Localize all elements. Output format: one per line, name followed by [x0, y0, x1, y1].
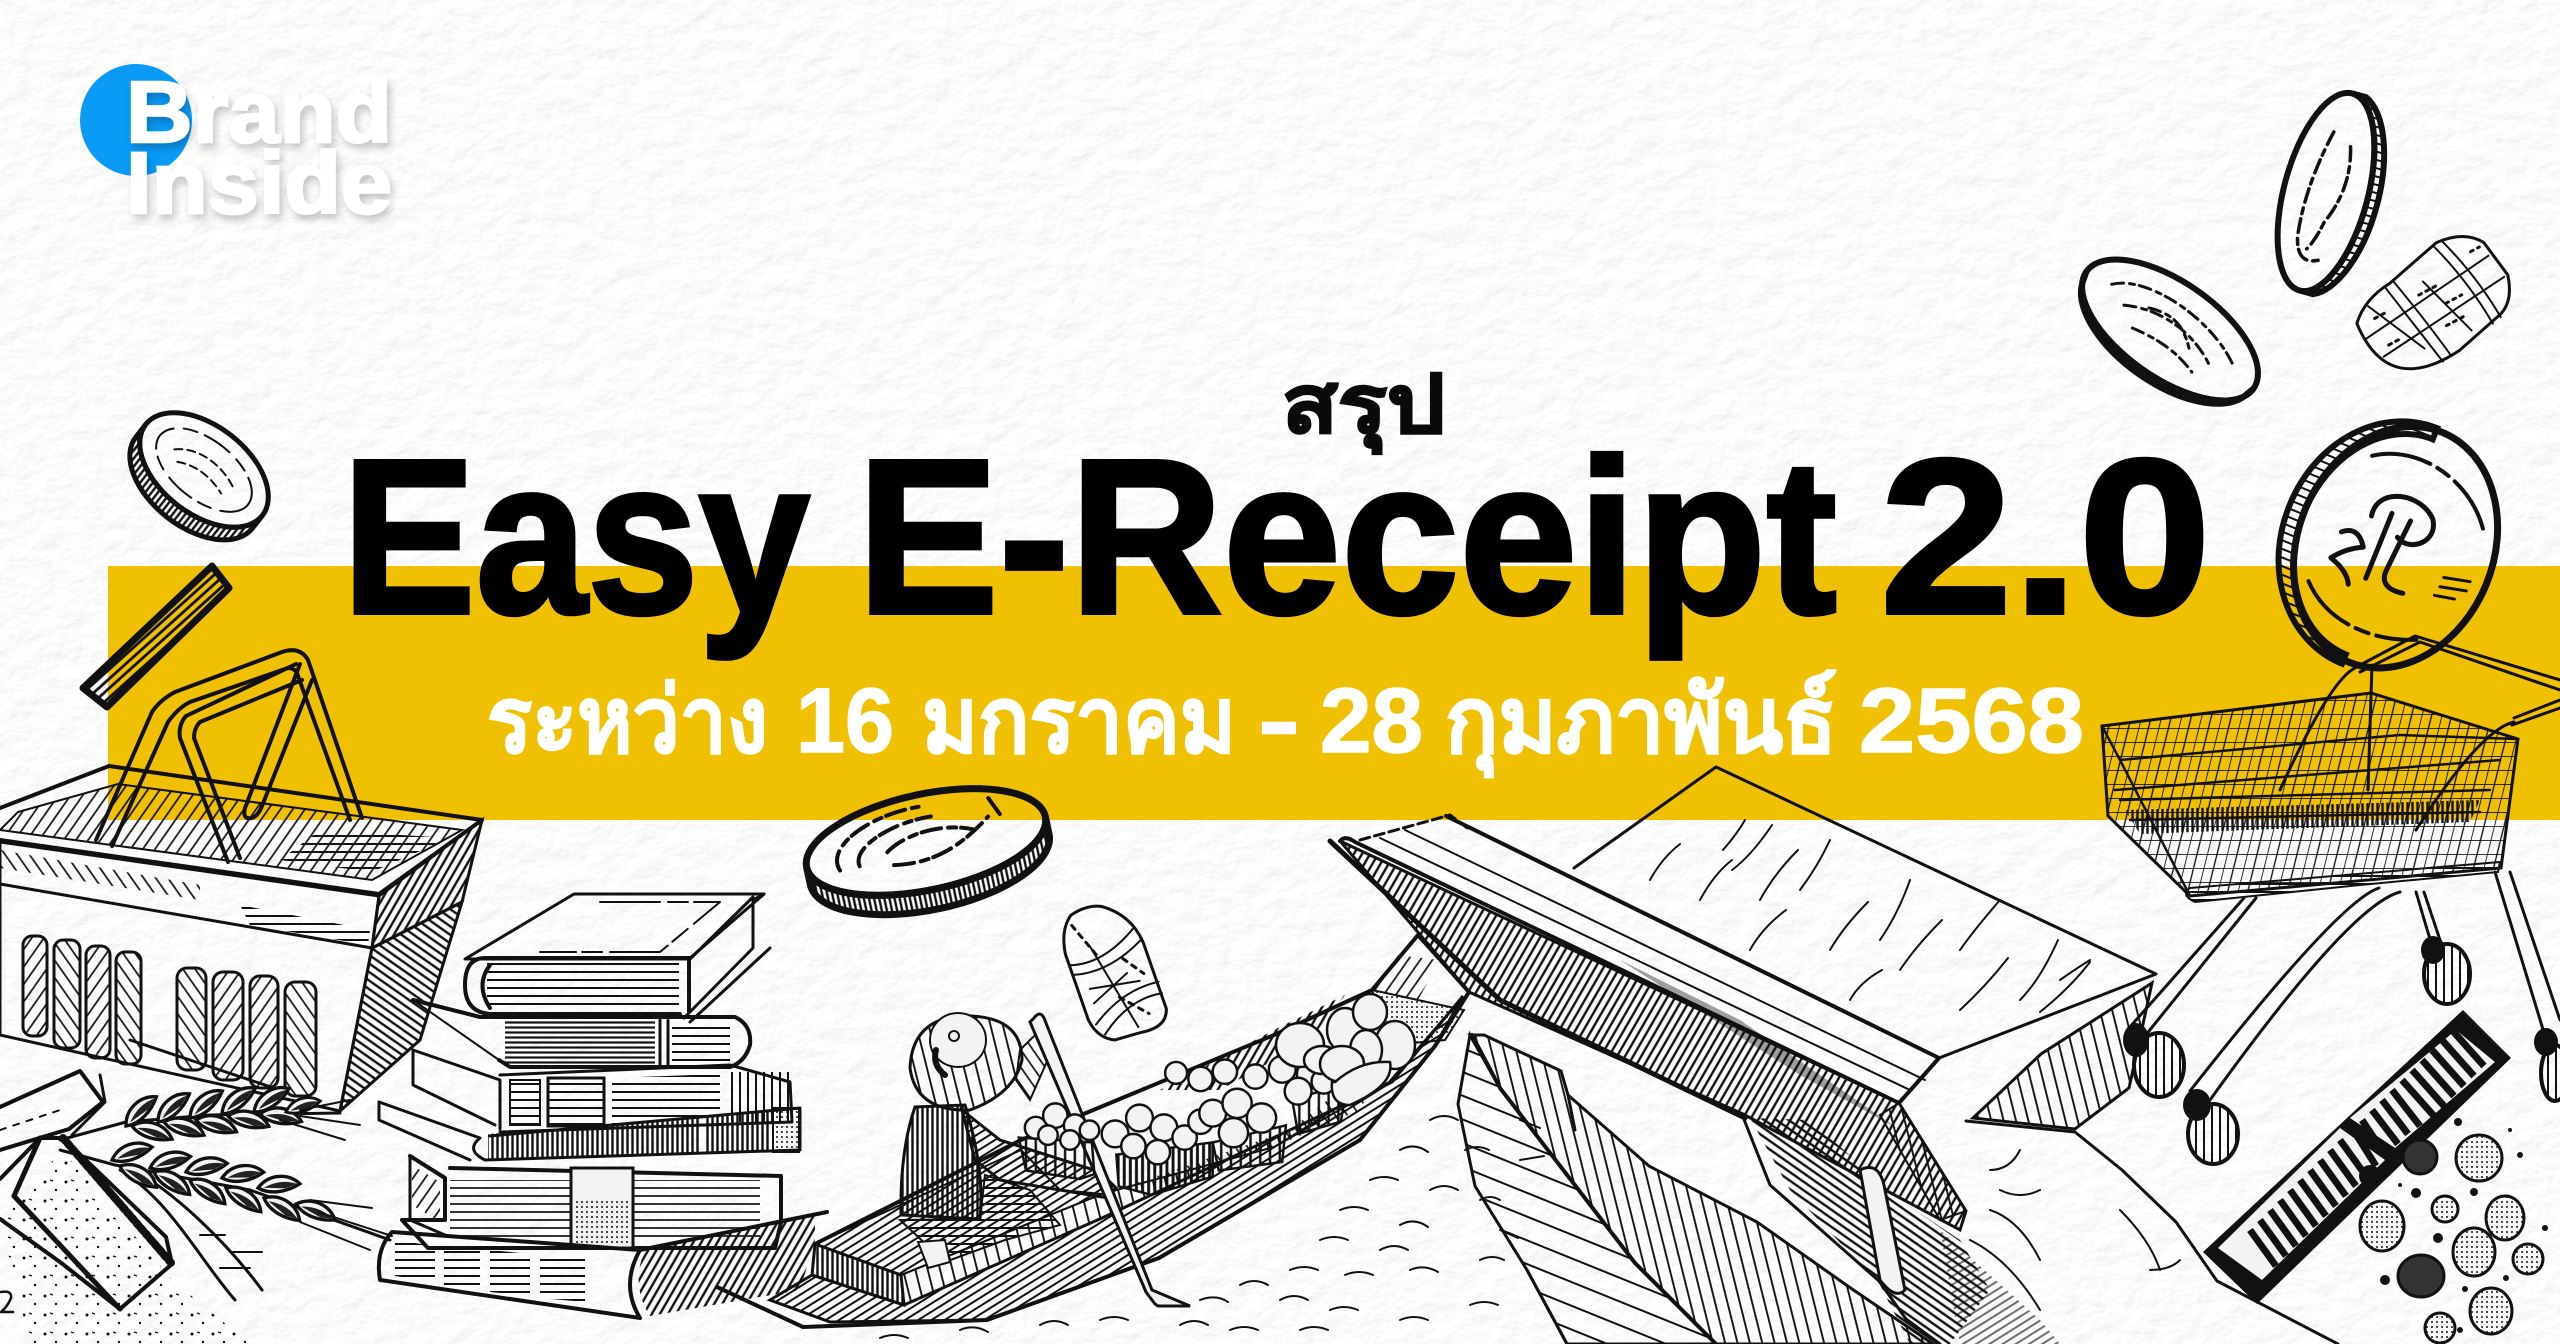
basket windows — [23, 936, 316, 1096]
wheat ear lower — [60, 1139, 392, 1300]
icon: coin top right tall — [2259, 83, 2403, 304]
icon: coin upper left — [109, 390, 289, 563]
icon: coin centre — [797, 770, 1059, 934]
rice scoop and grain — [0, 1071, 250, 1344]
fruit pile — [1276, 994, 1415, 1105]
title: E-Receipt — [857, 413, 1837, 660]
basket body — [0, 884, 462, 1111]
subtitle: date range — [487, 669, 2084, 778]
wheat ear upper — [60, 1081, 360, 1146]
book spine — [1330, 815, 1966, 1230]
boat hull — [717, 935, 1469, 1327]
vendor — [900, 1013, 1116, 1268]
subtitle: date range: ระหว่าง — [487, 670, 768, 772]
basket handles — [96, 650, 362, 862]
logo: Brand Inside: Brand — [126, 64, 392, 161]
shopping cart — [2102, 636, 2560, 1164]
book 1 — [465, 894, 770, 1022]
icon: coin top right tilted — [2055, 232, 2281, 433]
paddle — [1030, 1014, 1190, 1306]
book lower pages — [1973, 983, 2152, 1129]
open book with hand — [1330, 767, 2338, 1344]
icon: banana-leaf parcel — [1055, 894, 1171, 1047]
subtitle: date range: - — [1258, 670, 1300, 772]
book 4 — [379, 1102, 800, 1160]
cart handle — [2280, 636, 2560, 830]
subtitle: date range: 2568 — [1859, 670, 2084, 772]
title: 2.0 — [1880, 413, 2211, 660]
icon: barcode strip right — [2203, 1010, 2511, 1304]
page — [1574, 767, 2156, 1058]
subtitle: date range: 16 — [796, 670, 894, 772]
heading: summary label: สรุป — [1282, 360, 1445, 455]
boat with vendor — [717, 935, 1469, 1327]
book 6 — [379, 1212, 827, 1318]
hand — [1743, 1117, 2338, 1344]
cart frame and wheels — [2123, 872, 2560, 1164]
book 5 — [402, 1156, 781, 1248]
basket rim — [0, 766, 482, 948]
edge mark bottom left — [1, 1292, 13, 1312]
subtitle: date range: มกราคม — [922, 670, 1236, 772]
title — [342, 413, 2211, 660]
book 2 — [413, 1000, 750, 1067]
book 3 — [413, 1050, 792, 1132]
icon: leaf-wrapped parcel top right — [2340, 220, 2529, 389]
icon: shopping basket — [0, 650, 482, 1111]
logo: Brand Inside: Inside — [126, 135, 392, 232]
subtitle: date range: กุมภาพันธ์ — [1445, 669, 1837, 778]
subtitle: date range: 28 — [1320, 670, 1423, 772]
icon: large coin on cart — [2242, 388, 2534, 703]
produce baskets — [1019, 1056, 1347, 1195]
book stack — [379, 894, 827, 1318]
title: Easy — [342, 413, 810, 660]
banana leaf — [1458, 1035, 1933, 1344]
cart basket — [2102, 693, 2518, 902]
icon: falling berries — [2359, 1118, 2548, 1343]
yellow band — [108, 566, 2560, 820]
logo: Brand Inside — [80, 64, 392, 232]
icon: barcode strip left — [83, 566, 229, 707]
river water ripples — [880, 1116, 1544, 1338]
